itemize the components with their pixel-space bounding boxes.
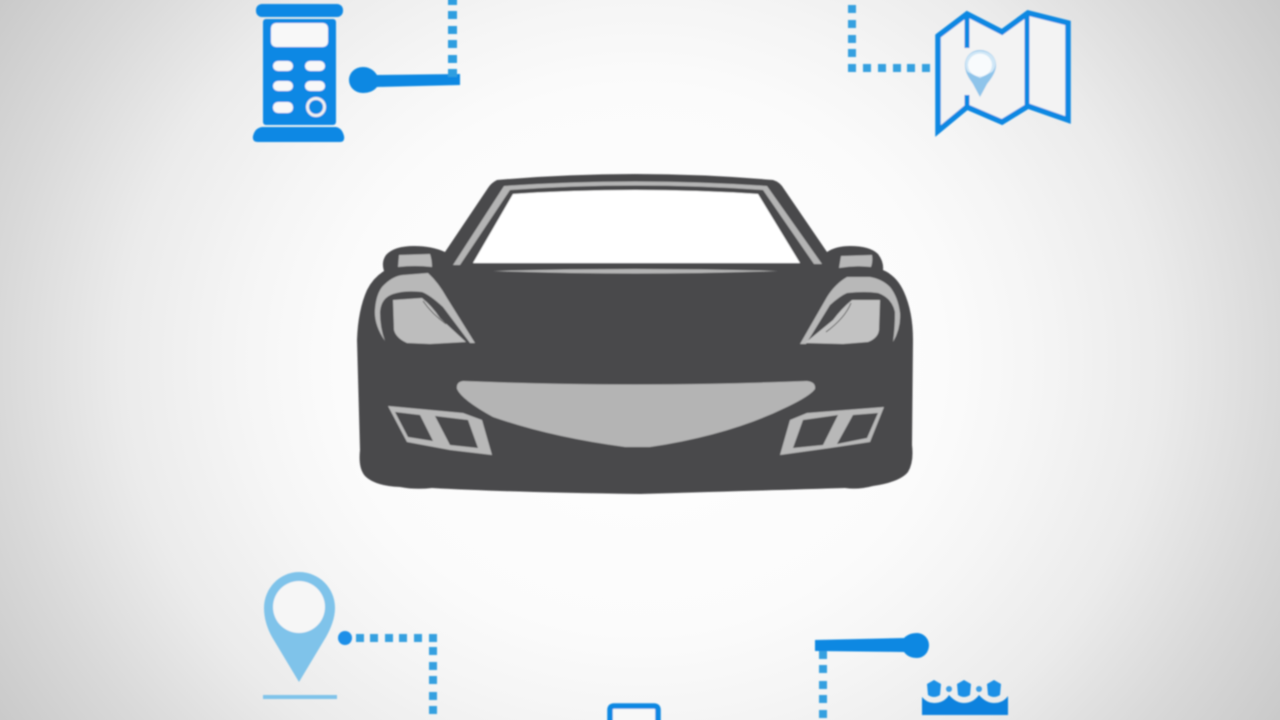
right headlight brow	[800, 277, 900, 344]
right vent	[780, 407, 884, 455]
left headlight brow	[375, 273, 475, 343]
windshield	[473, 190, 800, 263]
left headlight lamp	[393, 298, 466, 344]
left lamp detail line	[423, 301, 446, 324]
left mirror	[398, 254, 432, 267]
icon: monitor top edge	[610, 706, 658, 720]
car body silhouette	[357, 174, 913, 494]
left vent	[388, 406, 492, 455]
icon: crown band	[922, 680, 1008, 715]
right headlight lamp	[805, 300, 880, 344]
connector: map link	[848, 5, 930, 72]
icon: folded map with pin	[938, 13, 1068, 131]
hood line highlight	[493, 269, 778, 274]
right mirror	[839, 255, 872, 268]
connector: calculator link	[349, 0, 460, 93]
connector: crown link	[815, 633, 929, 718]
grille	[457, 381, 815, 447]
right lamp detail line	[826, 303, 851, 332]
connector: pin link	[338, 631, 437, 714]
car	[357, 174, 913, 494]
icon: calculator device	[253, 4, 344, 142]
icon: location pin	[263, 572, 337, 699]
windshield frame highlights	[453, 182, 822, 265]
